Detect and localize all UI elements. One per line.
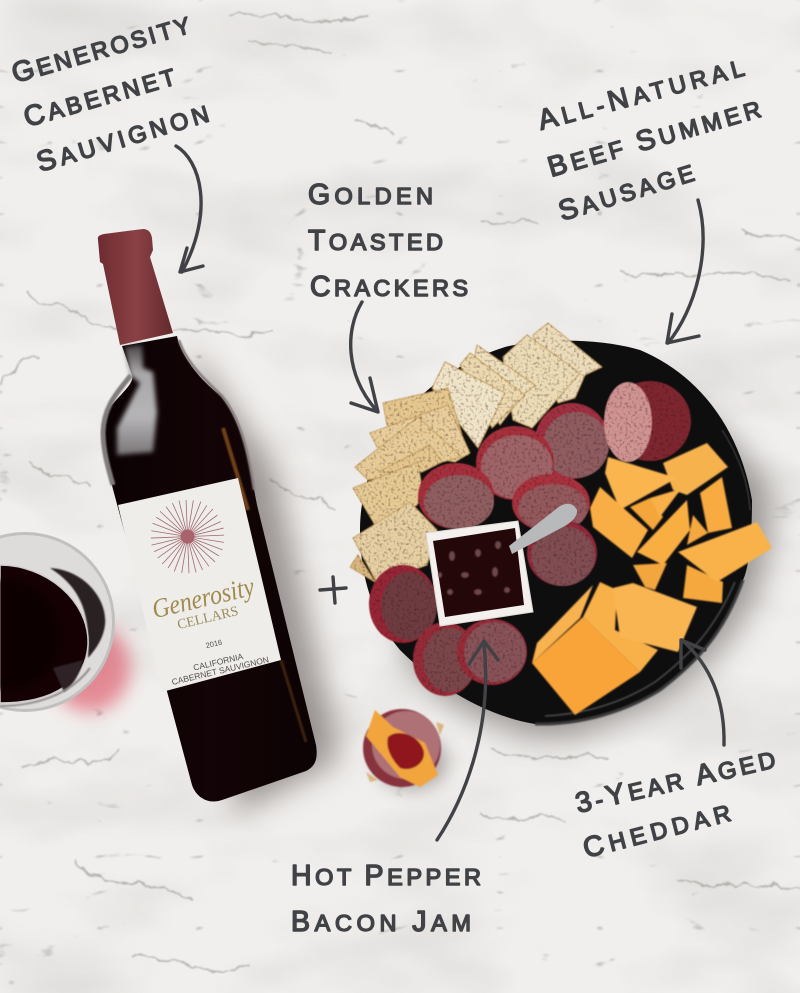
heading: Generosity Cabernet Sauvignon: GENEROSITY [8, 8, 194, 90]
label varietal: CALIFORNIA [192, 651, 244, 673]
heading: 3-Year Aged Cheddar: 3-YEAR AGED [572, 743, 778, 820]
sausage: slice under spoon [527, 520, 597, 586]
plate [360, 341, 752, 724]
crackers [350, 323, 602, 583]
label varietal line two: CABERNET SAUVIGNON [171, 654, 270, 687]
wine bottle [98, 229, 317, 802]
heading: Generosity Cabernet Sauvignon [8, 8, 213, 179]
arrow: to bacon jam [437, 641, 498, 840]
bottle sheen [117, 345, 157, 455]
heading: All-Natural Beef Summer Sausage [535, 51, 764, 228]
bottle lower glint [281, 660, 306, 742]
heading: All-Natural Beef Summer Sausage: BEEF SUMMER [544, 92, 764, 184]
shadows [50, 345, 772, 815]
arrow: to summer sausage [667, 200, 703, 343]
sausage slices [369, 381, 691, 696]
sausage: slice bottom left [413, 622, 477, 696]
snack bite [363, 709, 444, 787]
heading: Golden Toasted Crackers: GOLDEN [308, 179, 433, 211]
heading: All-Natural Beef Summer Sausage: SAUSAGE [555, 156, 698, 228]
label sunburst [143, 492, 232, 581]
jam dish [426, 504, 577, 626]
arrow: to crackers [351, 302, 378, 412]
sausage: slice bottom right [457, 619, 527, 685]
sausage: whole end piece [604, 381, 691, 462]
bottle amber glint [223, 428, 248, 510]
sausage: slice upper right [535, 403, 609, 479]
sausage: slice lower left [369, 565, 437, 643]
sausage: slice left [418, 463, 494, 529]
arrow: to cheddar [681, 640, 724, 745]
label vintage: 2016 [205, 638, 223, 650]
heading: Hot Pepper Bacon Jam: HOT PEPPER [291, 860, 481, 892]
label brand: Generosity [149, 571, 257, 624]
bottle right rim [179, 340, 254, 490]
bottle body [102, 336, 317, 802]
heading: 3-Year Aged Cheddar: CHEDDAR [580, 796, 734, 865]
wine glass [0, 532, 115, 712]
heading: Golden Toasted Crackers: TOASTED [308, 225, 443, 257]
bottle rim highlight [103, 375, 131, 485]
cheddar [532, 443, 772, 715]
icon: plus sign [320, 577, 346, 603]
label cellars: CELLARS [176, 604, 240, 633]
heading: Generosity Cabernet Sauvignon: SAUVIGNON [33, 97, 213, 179]
bottle capsule [98, 229, 173, 345]
heading: Hot Pepper Bacon Jam: BACON JAM [291, 906, 471, 938]
sausage: slice center [476, 426, 554, 500]
heading: 3-Year Aged Cheddar [572, 743, 778, 865]
heading: Golden Toasted Crackers [308, 179, 468, 303]
heading: All-Natural Beef Summer Sausage: ALL-NATURAL [535, 51, 748, 137]
heading: Hot Pepper Bacon Jam [291, 860, 481, 938]
sausage: slice behind spoon [512, 474, 590, 532]
bottle label [118, 478, 281, 692]
heading: Generosity Cabernet Sauvignon: CABERNET [20, 60, 179, 134]
spoon [509, 504, 577, 554]
heading: Golden Toasted Crackers: CRACKERS [310, 271, 468, 303]
arrow: to wine bottle [176, 146, 203, 272]
